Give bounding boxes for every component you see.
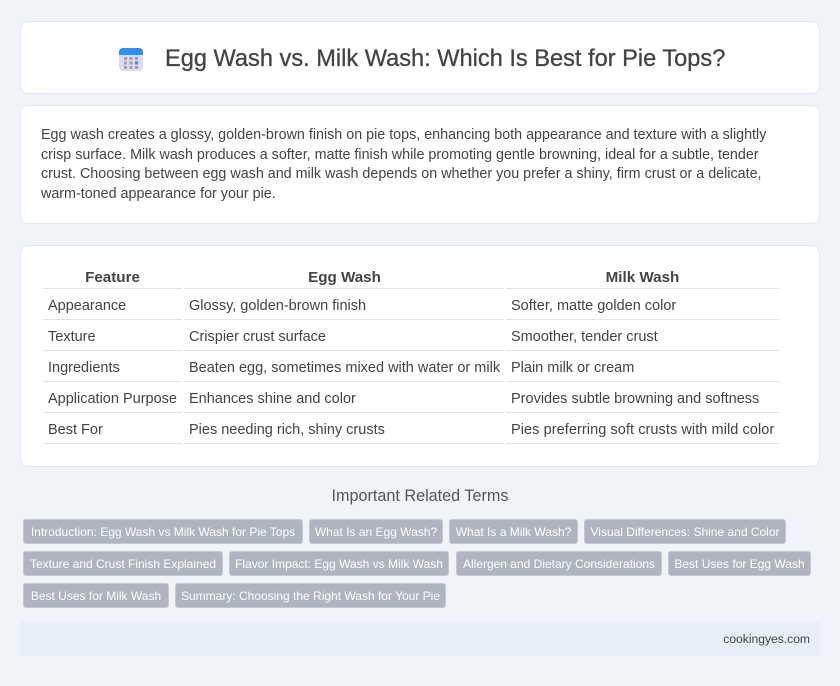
related terms tags: Best Uses for Egg Wash — [674, 557, 805, 571]
row: appearance — [48, 298, 676, 314]
comparison table — [43, 269, 779, 444]
footer bar — [20, 622, 820, 656]
related terms tags: Flavor Impact: Egg Wash vs Milk Wash — [235, 557, 443, 571]
related terms tags — [23, 519, 811, 608]
row: best for: Best For — [48, 422, 103, 438]
table header: feature: Feature — [85, 269, 140, 286]
related terms tags: Summary: Choosing the Right Wash for Your Pie — [181, 589, 440, 603]
table header: egg wash: Egg Wash — [308, 269, 381, 286]
related terms heading: Important Related Terms — [332, 487, 508, 505]
panel: header — [20, 21, 820, 94]
row: ingredients: Beaten egg, sometimes mixed with water or milk — [189, 360, 500, 376]
row: ingredients: Plain milk or cream — [511, 360, 634, 376]
related terms tags: Visual Differences: Shine and Color — [590, 525, 780, 539]
row: texture: Texture — [48, 329, 96, 345]
panel: comparison table — [20, 245, 820, 467]
summary text: warm-toned appearance for your pie. — [41, 186, 276, 202]
title: Egg Wash vs. Milk Wash: Which Is Best for Pie Tops? — [165, 46, 725, 72]
icon: calendar — [119, 48, 143, 71]
row: texture: Smoother, tender crust — [511, 329, 658, 345]
table header: milk wash: Milk Wash — [606, 269, 679, 286]
row: ingredients: Ingredients — [48, 360, 120, 376]
row: application purpose — [48, 391, 759, 407]
summary text: crisp surface. Milk wash produces a softer, matte finish while promoting gentle browning, ideal for a subtle, tender — [41, 146, 759, 162]
row: application purpose: Application Purpose — [48, 391, 177, 407]
row: best for — [48, 422, 774, 438]
footer source: cookingyes.com — [723, 632, 810, 646]
row: ingredients — [48, 360, 634, 376]
related terms tags: What Is a Milk Wash? — [456, 525, 571, 539]
related terms tags: Best Uses for Milk Wash — [31, 589, 161, 603]
row: application purpose: Enhances shine and color — [189, 391, 356, 407]
related terms tags: Introduction: Egg Wash vs Milk Wash for Pie Tops — [31, 525, 295, 539]
summary text — [41, 127, 766, 202]
row: best for: Pies preferring soft crusts with mild color — [511, 422, 774, 438]
summary text: crust. Choosing between egg wash and milk wash depends on whether you prefer a shiny, firm crust or a delicate, — [41, 166, 762, 182]
row: best for: Pies needing rich, shiny crusts — [189, 422, 385, 438]
related terms tags: What Is an Egg Wash? — [315, 525, 437, 539]
row: texture — [48, 329, 658, 345]
row: application purpose: Provides subtle browning and softness — [511, 391, 759, 407]
summary text: Egg wash creates a glossy, golden-brown finish on pie tops, enhancing both appearance and texture with a slightly — [41, 127, 766, 143]
related terms tags: Allergen and Dietary Considerations — [463, 557, 655, 571]
related terms tags: Texture and Crust Finish Explained — [30, 557, 216, 571]
row: appearance: Glossy, golden-brown finish — [189, 298, 366, 314]
row: appearance: Softer, matte golden color — [511, 298, 676, 314]
row: appearance: Appearance — [48, 298, 126, 314]
panel: summary — [20, 105, 820, 224]
row: texture: Crispier crust surface — [189, 329, 326, 345]
